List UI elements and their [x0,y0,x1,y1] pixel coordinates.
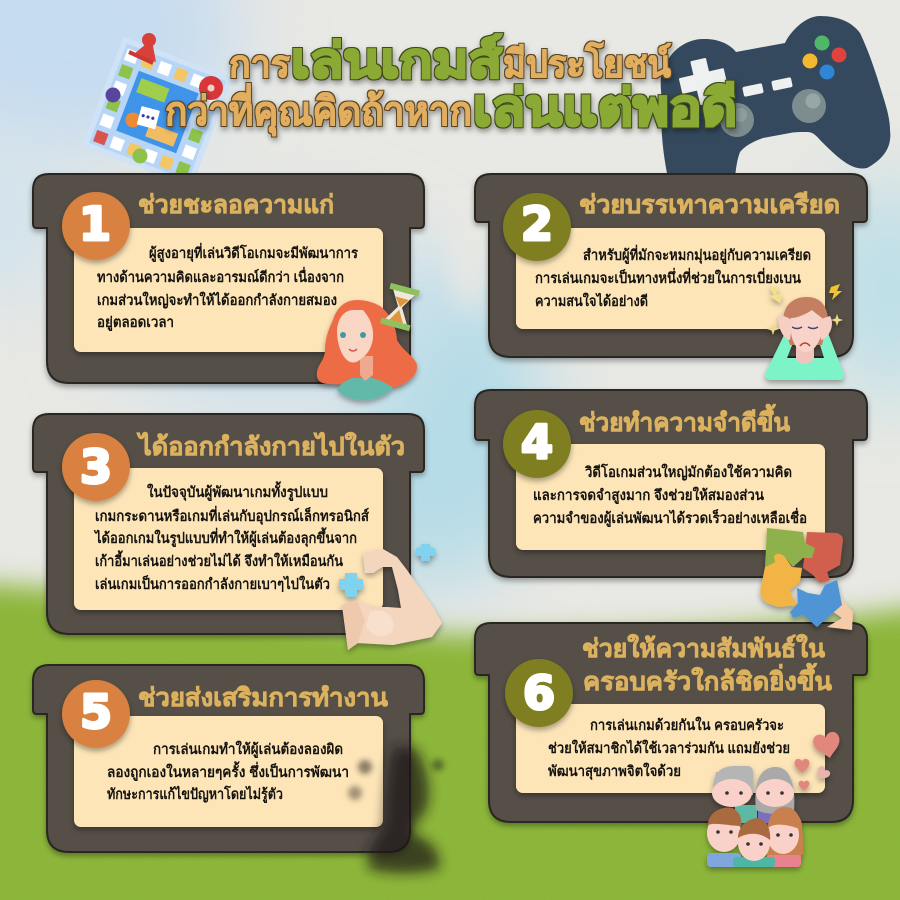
card 5 body text: ลองถูกเองในหลายๆครั้ง ชึ่งเป็นการพัฒนา [107,761,349,781]
panel: card 2 [475,174,867,357]
card 3 body text [93,481,369,593]
card 6 heading: ครอบครัวใกล้ชิดยิ่งขึ้น [583,662,832,696]
title: กว่าที่คุณคิดถ้าหาก [165,83,472,137]
card 3 body text: ในปัจจุบันผู้พัฒนาเกมทั้งรูปแบบ [147,481,328,501]
card 6 body text: การเล่นเกมด้วยกันใน ครอบครัวจะ [590,716,784,734]
card 4 body text: วิดีโอเกมส่วนใหญ่มักต้องใช้ความคิด [584,463,792,481]
card 5 body text: ทักษะการแก้ไขปัญหาโดยไม่รู้ตัว [107,785,283,803]
card 1 body text: ทางด้านความคิดและอารมณ์ดีกว่า เนื่องจาก [97,266,344,286]
card 5 number badge [62,680,130,748]
card 3 body text: เกมกระดานหรือเกมที่เล่นกับอุปกรณ์เล็กทรอนิกส์ [95,505,369,525]
grandparents [712,766,794,823]
card 1 body text: อยู่ตลอดเวลา [97,315,174,331]
card 6 number badge [505,659,573,727]
icon: woman with hourglass [317,283,420,400]
card 4 body text: และการจดจำสูงมาก จึงช่วยให้สมองส่วน [533,486,764,504]
panel: card 4 [475,390,867,577]
card 2 heading: ช่วยบรรเทาความเครียด [579,191,840,219]
card 5 number badge: 5 [80,685,112,739]
panel: card 1 [33,174,424,383]
card 3 text box [74,468,383,610]
card 4 number badge [503,410,571,478]
lightning bolts and sparkles [767,284,843,335]
panel: card 5 [33,665,424,852]
card 1 body text: ผู้สูงอายุที่เล่นวิดีโอเกมจะมีพัฒนาการ [149,242,358,262]
panel: card 6 [475,623,867,822]
card 6 number badge: 6 [523,666,555,720]
card 4 text box [516,444,825,550]
card 3 frame [33,414,424,634]
card 4 number badge: 4 [521,415,553,469]
icon: red pawn [129,33,156,63]
icon: stressed person [765,284,844,380]
card 5 frame [33,665,424,852]
shadow: blurred dark blob over card 5 [348,747,444,873]
card 1 number badge [62,192,130,260]
card 4 frame [475,390,867,577]
card 6 frame [475,623,867,822]
card 1 frame [33,174,424,383]
board tiles [93,48,222,176]
card 1 body text [97,242,358,331]
title: การ [229,44,291,86]
card 3 number badge [62,433,130,501]
card 4 body text [533,463,807,527]
card 5 text box [74,716,383,827]
select and start buttons [742,77,793,97]
card 6 body text [548,716,790,780]
coloured buttons [802,36,846,80]
plus icons [339,544,435,597]
card 6 body text: ช่วยให้สมาชิกได้ใช้เวลาร่วมกัน แถมยังช่วย [548,739,790,757]
icon: family and hearts [707,731,843,867]
title: มีประโยชน์ [503,41,671,86]
card 6 body text: พัฒนาสุขภาพจิตใจด้วย [548,762,681,780]
card 3 body text: เล่นเกมเป็นการออกกำลังกายเบาๆไปในตัว [95,574,330,593]
card 2 body text: สำหรับผู้ที่มักจะหมกมุ่นอยู่กับความเครียด [583,244,811,264]
card 1 body text: เกมส่วนใหญ่จะทำให้ได้ออกกำลังกายสมอง [97,291,337,309]
card 2 body text [535,244,811,310]
card 5 heading: ช่วยส่งเสริมการทำงาน [138,684,388,712]
card 4 body text: ความจำของผู้เล่นพัฒนาได้รวดเร็วอย่างเหลือเชื่อ [533,507,807,527]
illustration: board game [82,37,233,187]
hourglass [380,283,420,331]
card 3 number badge: 3 [80,440,112,494]
card 4 heading: ช่วยทำความจำดีขึ้น [579,403,790,437]
d-pad [677,56,729,107]
card 2 frame [475,174,867,357]
card 5 body text [107,740,349,803]
card 2 number badge [503,193,571,261]
card 3 body text: เก้าอี้มาเล่นอย่างช่วยไม่ได้ จึงทำให้เหมือนกัน [95,550,343,570]
card 6 text box [516,704,825,793]
title: เล่นเกมส์ [291,34,503,88]
icon: flexed arm with plus signs [339,544,442,650]
card 6 heading: ช่วยให้ความสัมพันธ์ใน [582,633,825,663]
card 2 body text: ความสนใจได้อย่างดี [535,292,648,310]
card 3 body text: ได้ออกเกมในรูปแบบที่ทำให้ผู้เล่นต้องลุกขึ้นจาก [93,527,357,547]
card 5 body text: การเล่นเกมทำให้ผู้เล่นต้องลองผิด [153,740,343,758]
card 3 heading: ได้ออกกำลังกายไปในตัว [136,431,405,461]
card 2 body text: การเล่นเกมจะเป็นทางหนึ่งที่ช่วยในการเบี่ยงเบน [535,267,801,287]
card 1 text box [74,228,383,352]
illustration: game controller [661,16,890,178]
card 1 number badge: 1 [79,197,111,251]
card 2 text box [516,228,825,329]
icon: puzzle pieces with hand [760,528,853,630]
hearts [795,731,843,791]
board tokens and die [106,88,160,164]
card 1 heading: ช่วยชะลอความแก่ [138,191,334,219]
card 6 heading [582,633,832,696]
joysticks [720,89,826,137]
card 2 number badge: 2 [521,197,553,251]
title [165,34,737,137]
panel: card 3 [33,414,424,634]
icon: red token [199,76,223,100]
parents and child [707,807,803,867]
title: เล่นแต่พอดี [473,80,737,136]
